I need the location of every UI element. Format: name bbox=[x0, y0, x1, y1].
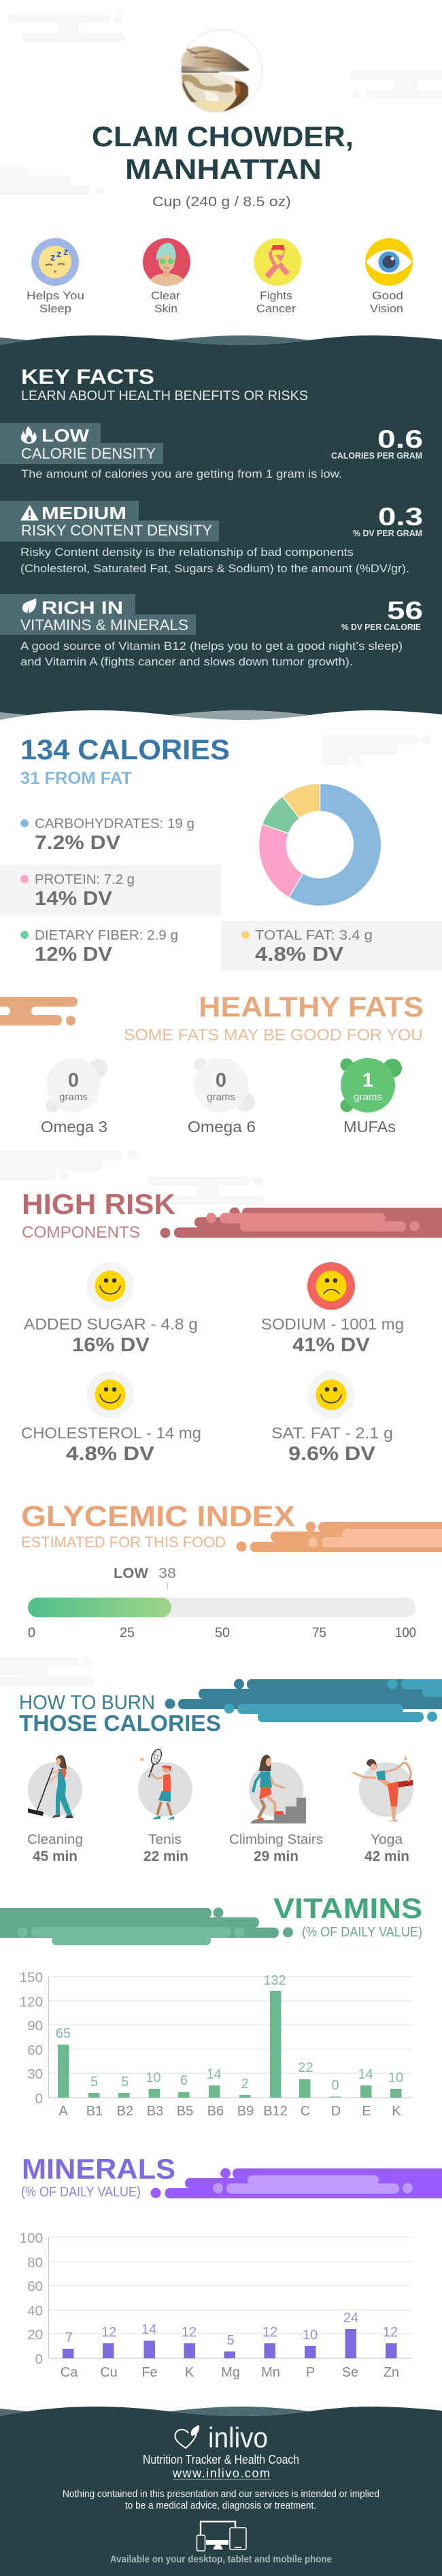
heading: vitamins: VITAMINS bbox=[273, 1892, 422, 1924]
bar chart: vitamins: 132 bbox=[263, 1973, 286, 1988]
risk item: cholesterol bbox=[21, 1371, 201, 1465]
heading: how to burn those calories: HOW TO BURN bbox=[19, 1691, 155, 1714]
bar chart: vitamins: 150 bbox=[20, 1970, 43, 1985]
activity: yoga: 42 min bbox=[364, 1849, 409, 1864]
label: helps you sleep bbox=[27, 289, 84, 315]
badge: mufas: grams bbox=[354, 1091, 382, 1103]
bar chart: minerals: Mn bbox=[261, 2365, 280, 2380]
gauge: glycemic score: LOW bbox=[114, 1566, 148, 1581]
heading: how to burn those calories bbox=[19, 1691, 221, 1736]
bar chart: vitamins: E bbox=[362, 2104, 371, 2119]
risk item: saturated fat: SAT. FAT - 2.1 g bbox=[271, 1424, 393, 1442]
fact: low calorie density bbox=[0, 423, 423, 480]
legend: dietary fiber: DIETARY FIBER: 2.9 g bbox=[35, 928, 178, 943]
fact: medium risky content density: % DV PER GRAM bbox=[353, 528, 422, 538]
bar chart: minerals: 14 bbox=[141, 2322, 156, 2337]
panel: high risk bbox=[21, 1188, 442, 1465]
legend: total fat: 4.8% DV bbox=[255, 944, 344, 965]
availability note: Available on your desktop, tablet and mobile phone bbox=[110, 2554, 332, 2565]
bar chart: vitamins: D bbox=[331, 2104, 341, 2119]
bar chart: minerals: 5 bbox=[226, 2333, 235, 2348]
label: helps you sleep: Sleep bbox=[39, 302, 71, 315]
heading: vitamins bbox=[273, 1892, 422, 1940]
heading: how to burn those calories: THOSE CALORIES bbox=[19, 1711, 221, 1736]
bar chart: vitamins: B2 bbox=[117, 2104, 133, 2119]
heading: 134 calories bbox=[20, 733, 230, 788]
bar chart: minerals: Mg bbox=[221, 2365, 240, 2380]
fact: medium risky content density: RISKY CONTENT DENSITY bbox=[21, 522, 212, 539]
badge: omega 3: Omega 3 bbox=[41, 1118, 107, 1136]
heading: high risk: COMPONENTS bbox=[22, 1223, 140, 1242]
bar chart: minerals: K bbox=[185, 2365, 194, 2380]
risk item: added sugar: 16% DV bbox=[72, 1334, 150, 1356]
gauge: glycemic score: 38 bbox=[158, 1566, 176, 1581]
label: helps you sleep: Helps You bbox=[27, 289, 84, 302]
fact: rich in vitamins and minerals: A good source of Vitamin B12 (helps you to get a good night’s sleep) bbox=[20, 640, 403, 653]
icon: sleep: z bbox=[50, 252, 56, 263]
label: fights cancer: Cancer bbox=[256, 302, 296, 315]
legend: dietary fiber bbox=[20, 928, 178, 965]
icon: clear skin bbox=[143, 238, 190, 286]
bar chart: minerals: 12 bbox=[182, 2325, 197, 2340]
badge: omega 6 bbox=[188, 1058, 256, 1136]
bar chart: vitamins: 5 bbox=[90, 2075, 98, 2090]
bar chart: vitamins: 0 bbox=[35, 2091, 43, 2107]
legend: total fat: TOTAL FAT: 3.4 g bbox=[255, 928, 373, 943]
bar chart: minerals bbox=[20, 2230, 412, 2380]
legend: protein: 14% DV bbox=[35, 888, 113, 910]
gauge: glycemic score: 50 bbox=[215, 1625, 230, 1640]
risk item: sodium: SODIUM - 1001 mg bbox=[261, 1315, 404, 1333]
icon: devices bbox=[197, 2522, 246, 2551]
gauge: glycemic score: 100 bbox=[395, 1625, 416, 1640]
panel: key facts bbox=[0, 335, 442, 720]
bar chart: vitamins: 14 bbox=[358, 2067, 373, 2082]
activity: cleaning: 45 min bbox=[33, 1849, 78, 1864]
panel: healthy fats bbox=[0, 991, 424, 1136]
heading: key facts bbox=[21, 365, 308, 403]
fact: rich in vitamins and minerals: 56 bbox=[387, 597, 423, 625]
bar chart: minerals: 12 bbox=[262, 2325, 277, 2340]
fact: medium risky content density: (Cholesterol, Saturated Fat, Sugars & Sodium) to the amount (%DV/gr). bbox=[20, 562, 409, 575]
heading: vitamins: (% OF DAILY VALUE) bbox=[302, 1925, 422, 1940]
serving size: Cup (240 g / 8.5 oz) bbox=[152, 195, 291, 210]
bar chart: minerals: 10 bbox=[303, 2328, 318, 2343]
activity: tennis: 22 min bbox=[143, 1849, 188, 1864]
label: clear skin: Skin bbox=[154, 302, 177, 315]
heading: high risk bbox=[22, 1188, 175, 1242]
badge: omega 3: grams bbox=[59, 1091, 88, 1103]
heading: key facts: LEARN ABOUT HEALTH BENEFITS OR RISKS bbox=[21, 389, 308, 403]
fact: medium risky content density bbox=[0, 501, 423, 575]
icon: cancer ribbon bbox=[254, 238, 301, 286]
gauge: glycemic score bbox=[28, 1566, 416, 1640]
legend: total fat bbox=[241, 928, 373, 965]
label: fights cancer bbox=[256, 289, 296, 315]
gauge: glycemic score: 0 bbox=[28, 1625, 35, 1640]
bar chart: minerals: 12 bbox=[383, 2325, 398, 2340]
decorative banner: healthy fats bbox=[0, 997, 86, 1025]
bar chart: vitamins: 2 bbox=[241, 2077, 249, 2092]
disclaimer: to be a medical advice, diagnosis or treatment. bbox=[125, 2500, 316, 2511]
label: clear skin: Clear bbox=[151, 289, 180, 302]
heading: 134 calories: 31 FROM FAT bbox=[20, 769, 132, 788]
bar chart: minerals: 60 bbox=[27, 2279, 43, 2294]
bar chart: vitamins: C bbox=[301, 2104, 310, 2119]
icon: flame bbox=[21, 426, 37, 444]
bar chart: minerals: 100 bbox=[20, 2230, 43, 2246]
heading: high risk: HIGH RISK bbox=[22, 1188, 175, 1220]
disclaimer: Nothing contained in this presentation and our services is intended or implied bbox=[63, 2489, 379, 2500]
activity: climbing stairs: Climbing Stairs bbox=[229, 1832, 323, 1847]
bar chart: vitamins: 10 bbox=[388, 2070, 403, 2085]
heading: healthy fats bbox=[124, 991, 424, 1044]
heading: glycemic index: GLYCEMIC INDEX bbox=[21, 1500, 295, 1533]
heading: key facts: KEY FACTS bbox=[21, 365, 154, 389]
bar chart: vitamins: 5 bbox=[121, 2075, 129, 2090]
bar chart: minerals: 80 bbox=[27, 2255, 43, 2270]
activity: climbing stairs: 29 min bbox=[254, 1849, 299, 1864]
decorative banner: high risk bbox=[160, 1207, 442, 1238]
bar chart: vitamins: 14 bbox=[207, 2067, 222, 2082]
bar chart: vitamins: 65 bbox=[56, 2026, 71, 2041]
bar chart: minerals: 40 bbox=[27, 2303, 43, 2319]
icon: warning triangle bbox=[20, 505, 39, 521]
panel: how to burn those calories bbox=[19, 1679, 442, 1864]
activity: cleaning: Cleaning bbox=[27, 1832, 83, 1847]
risk item: sodium: 41% DV bbox=[292, 1334, 371, 1356]
bar chart: vitamins: B3 bbox=[147, 2104, 163, 2119]
fact: medium risky content density: MEDIUM bbox=[41, 503, 126, 523]
icon: good vision bbox=[365, 238, 413, 286]
fact: rich in vitamins and minerals: and Vitamin A (fights cancer and slows down tumor growth). bbox=[20, 655, 353, 668]
fact: low calorie density: 0.6 bbox=[377, 425, 423, 453]
title: MANHATTAN bbox=[125, 153, 322, 185]
risk item: saturated fat: 9.6% DV bbox=[288, 1443, 376, 1465]
bar chart: vitamins bbox=[20, 1970, 412, 2119]
bar chart: minerals: Ca bbox=[61, 2365, 78, 2380]
bar chart: vitamins: 30 bbox=[27, 2066, 43, 2082]
bar chart: vitamins: B1 bbox=[86, 2104, 103, 2119]
risk item: cholesterol: CHOLESTEROL - 14 mg bbox=[21, 1424, 201, 1442]
bar chart: vitamins: 60 bbox=[27, 2043, 43, 2058]
legend: carbohydrates: 7.2% DV bbox=[35, 832, 121, 854]
heading: glycemic index bbox=[21, 1500, 295, 1551]
badge: omega 6: Omega 6 bbox=[188, 1118, 256, 1136]
bar chart: minerals: Fe bbox=[141, 2365, 158, 2380]
fact: medium risky content density: Risky Content density is the relationship of bad components bbox=[20, 546, 354, 559]
bar chart: vitamins: B6 bbox=[207, 2104, 224, 2119]
tagline: Nutrition Tracker & Health Coach bbox=[143, 2453, 299, 2466]
label: good vision bbox=[370, 289, 403, 315]
legend: dietary fiber: 12% DV bbox=[35, 944, 113, 965]
heading: healthy fats: HEALTHY FATS bbox=[199, 991, 424, 1023]
bar chart: minerals: Cu bbox=[100, 2365, 118, 2380]
heading: minerals: MINERALS bbox=[22, 2153, 175, 2185]
bar chart: minerals: 24 bbox=[343, 2311, 358, 2326]
badge: mufas: 1 bbox=[362, 1070, 373, 1091]
badge: omega 3: 0 bbox=[68, 1070, 79, 1091]
icon: sleep: z bbox=[56, 248, 61, 260]
icon: sleep bbox=[31, 238, 79, 286]
icon: leaf bbox=[22, 598, 36, 613]
badge: omega 6: grams bbox=[207, 1091, 235, 1103]
bar chart: minerals: 0 bbox=[35, 2351, 43, 2367]
gauge: glycemic score: 75 bbox=[312, 1625, 326, 1640]
bar chart: vitamins: 90 bbox=[27, 2018, 43, 2034]
bar chart: vitamins: B12 bbox=[263, 2104, 288, 2119]
website link: www.inlivo.com bbox=[172, 2466, 270, 2480]
fact: rich in vitamins and minerals: % DV PER CALORIE bbox=[341, 622, 421, 632]
fact: low calorie density: CALORIE DENSITY bbox=[21, 445, 156, 462]
label: good vision: Good bbox=[372, 289, 403, 302]
logo: inlivo bbox=[175, 2422, 268, 2454]
fact: low calorie density: LOW bbox=[41, 425, 90, 446]
bar chart: vitamins: 120 bbox=[20, 1994, 43, 2010]
legend: protein: PROTEIN: 7.2 g bbox=[35, 872, 135, 887]
gauge: glycemic score: 25 bbox=[120, 1625, 135, 1640]
bar chart: minerals: 20 bbox=[27, 2327, 43, 2343]
label: good vision: Vision bbox=[370, 302, 403, 315]
bar chart: vitamins: B5 bbox=[177, 2104, 193, 2119]
risk item: added sugar bbox=[24, 1262, 198, 1356]
badge: mufas: MUFAs bbox=[343, 1118, 396, 1136]
heading: minerals: (% OF DAILY VALUE) bbox=[21, 2185, 141, 2200]
heading: 134 calories: 134 CALORIES bbox=[20, 733, 230, 765]
decorative banner: glycemic index bbox=[237, 1521, 442, 1552]
risk item: added sugar: ADDED SUGAR - 4.8 g bbox=[24, 1315, 198, 1333]
bar chart: minerals: 7 bbox=[65, 2330, 73, 2345]
logo: inlivo: inlivo bbox=[208, 2422, 268, 2454]
fact: rich in vitamins and minerals bbox=[0, 594, 423, 668]
legend: carbohydrates: CARBOHYDRATES: 19 g bbox=[35, 816, 194, 831]
benefits row bbox=[27, 238, 413, 315]
label: fights cancer: Fights bbox=[260, 289, 292, 302]
bar chart: minerals: Se bbox=[342, 2365, 358, 2380]
food image: clam bbox=[180, 30, 262, 112]
activity: cleaning bbox=[27, 1755, 83, 1864]
label: clear skin bbox=[151, 289, 180, 315]
fact: medium risky content density: 0.3 bbox=[378, 503, 423, 531]
risk item: sodium bbox=[261, 1262, 404, 1356]
bar chart: vitamins: 6 bbox=[180, 2073, 188, 2088]
bar chart: vitamins: 22 bbox=[298, 2060, 313, 2075]
decorative banner: vitamins bbox=[0, 1908, 293, 1945]
panel: vitamins bbox=[0, 1892, 422, 2119]
bar chart: vitamins: B9 bbox=[237, 2104, 254, 2119]
bar chart: vitamins: K bbox=[392, 2104, 401, 2119]
donut chart bbox=[258, 784, 381, 906]
panel: calories bbox=[0, 733, 442, 971]
bar chart: vitamins: 10 bbox=[146, 2070, 161, 2085]
heading: healthy fats: SOME FATS MAY BE GOOD FOR YOU bbox=[124, 1026, 423, 1044]
title bbox=[92, 120, 354, 185]
panel: glycemic index bbox=[21, 1500, 442, 1640]
decorative banner: burn bbox=[165, 1679, 442, 1722]
badge: omega 6: 0 bbox=[216, 1070, 226, 1091]
panel: minerals bbox=[20, 2153, 442, 2380]
risk item: cholesterol: 4.8% DV bbox=[66, 1443, 155, 1465]
fact: rich in vitamins and minerals: VITAMINS & MINERALS bbox=[20, 616, 188, 633]
bar chart: vitamins: A bbox=[58, 2104, 68, 2119]
activity: tennis bbox=[138, 1748, 192, 1864]
fact: low calorie density: The amount of calories you are getting from 1 gram is low. bbox=[21, 467, 342, 480]
bar chart: vitamins: 0 bbox=[331, 2078, 339, 2093]
decorative banner: minerals bbox=[151, 2168, 442, 2198]
activity: yoga bbox=[353, 1755, 413, 1864]
fact: low calorie density: CALORIES PER GRAM bbox=[331, 450, 422, 461]
icon: sleep: z bbox=[63, 246, 68, 258]
legend: carbohydrates bbox=[20, 816, 194, 854]
activity: climbing stairs bbox=[229, 1755, 323, 1864]
badge: mufas bbox=[340, 1058, 402, 1136]
bar chart: minerals: 12 bbox=[101, 2325, 117, 2340]
title: CLAM CHOWDER, bbox=[92, 120, 354, 152]
legend: protein bbox=[20, 872, 135, 910]
risk item: saturated fat bbox=[271, 1371, 393, 1465]
heading: minerals bbox=[21, 2153, 175, 2200]
activity: tennis: Tenis bbox=[148, 1832, 182, 1847]
activity: yoga: Yoga bbox=[371, 1832, 403, 1847]
panel: footer bbox=[0, 2407, 442, 2576]
fact: rich in vitamins and minerals: RICH IN bbox=[41, 597, 123, 618]
disclaimer bbox=[63, 2489, 379, 2511]
badge: omega 3 bbox=[41, 1058, 107, 1136]
heading: glycemic index: ESTIMATED FOR THIS FOOD bbox=[21, 1534, 226, 1551]
bar chart: minerals: P bbox=[306, 2365, 315, 2380]
bar chart: minerals: Zn bbox=[384, 2365, 399, 2380]
